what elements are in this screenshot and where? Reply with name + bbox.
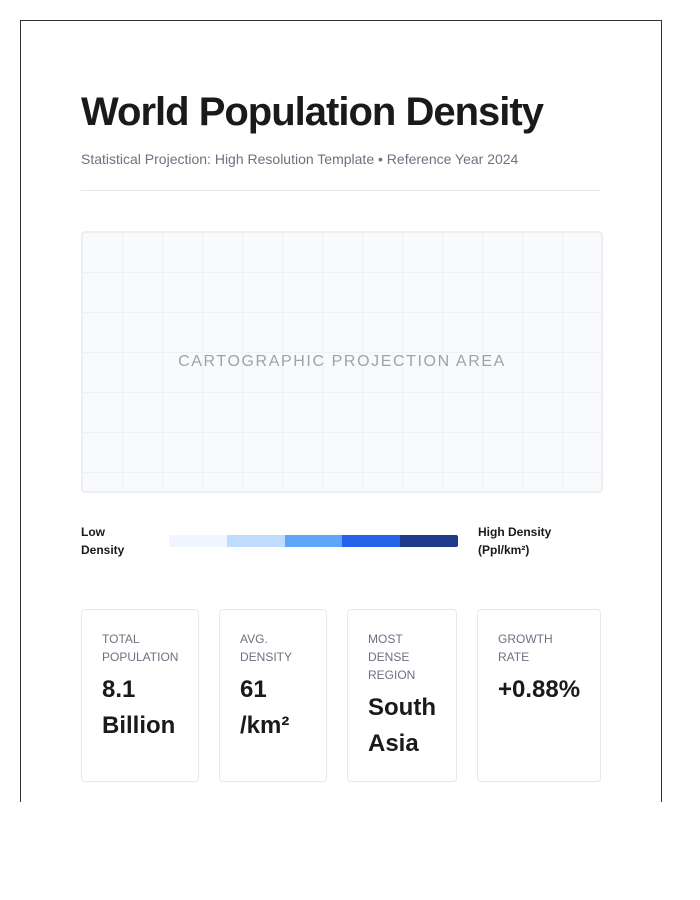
panel: total population: [81, 609, 199, 782]
stat value: Asia: [368, 730, 419, 757]
stat label: RATE: [498, 650, 529, 664]
subtitle: Statistical Projection: High Resolution Template • Reference Year 2024: [81, 151, 518, 167]
legend label: high density: [478, 525, 552, 557]
stat label: AVG.: [240, 632, 268, 646]
panel: average density: [219, 609, 327, 782]
legend label: low density: Density: [81, 543, 124, 557]
panel: most dense region: [347, 609, 457, 782]
stat label: [240, 632, 292, 664]
map placeholder label: CARTOGRAPHIC PROJECTION AREA: [178, 353, 506, 370]
stat label: MOST: [368, 632, 403, 646]
stat value: /km²: [240, 712, 289, 739]
stat value: 61: [240, 676, 267, 703]
page frame: [20, 20, 662, 802]
legend colour scale: [169, 535, 458, 547]
stat label: DENSE: [368, 650, 409, 664]
legend label: high density: High Density: [478, 525, 551, 539]
legend label: low density: Low: [81, 525, 105, 539]
panel: growth rate: [477, 609, 601, 782]
stat value: [368, 694, 436, 757]
stat value: +0.88%: [498, 676, 580, 703]
stat label: REGION: [368, 668, 415, 682]
stat label: DENSITY: [240, 650, 292, 664]
stat label: TOTAL: [102, 632, 140, 646]
title: World Population Density: [81, 90, 543, 134]
stat label: POPULATION: [102, 650, 178, 664]
stat value: [240, 676, 289, 739]
legend label: high density: (Ppl/km²): [478, 543, 529, 557]
stat value: Billion: [102, 712, 175, 739]
stat value: 8.1: [102, 676, 135, 703]
stat value: South: [368, 694, 436, 721]
legend label: low density: [81, 525, 124, 557]
stat label: [368, 632, 415, 682]
stat value: [102, 676, 175, 739]
stat label: GROWTH: [498, 632, 553, 646]
stat label: [498, 632, 553, 664]
panel: map projection area: [81, 231, 603, 493]
stat label: [102, 632, 178, 664]
